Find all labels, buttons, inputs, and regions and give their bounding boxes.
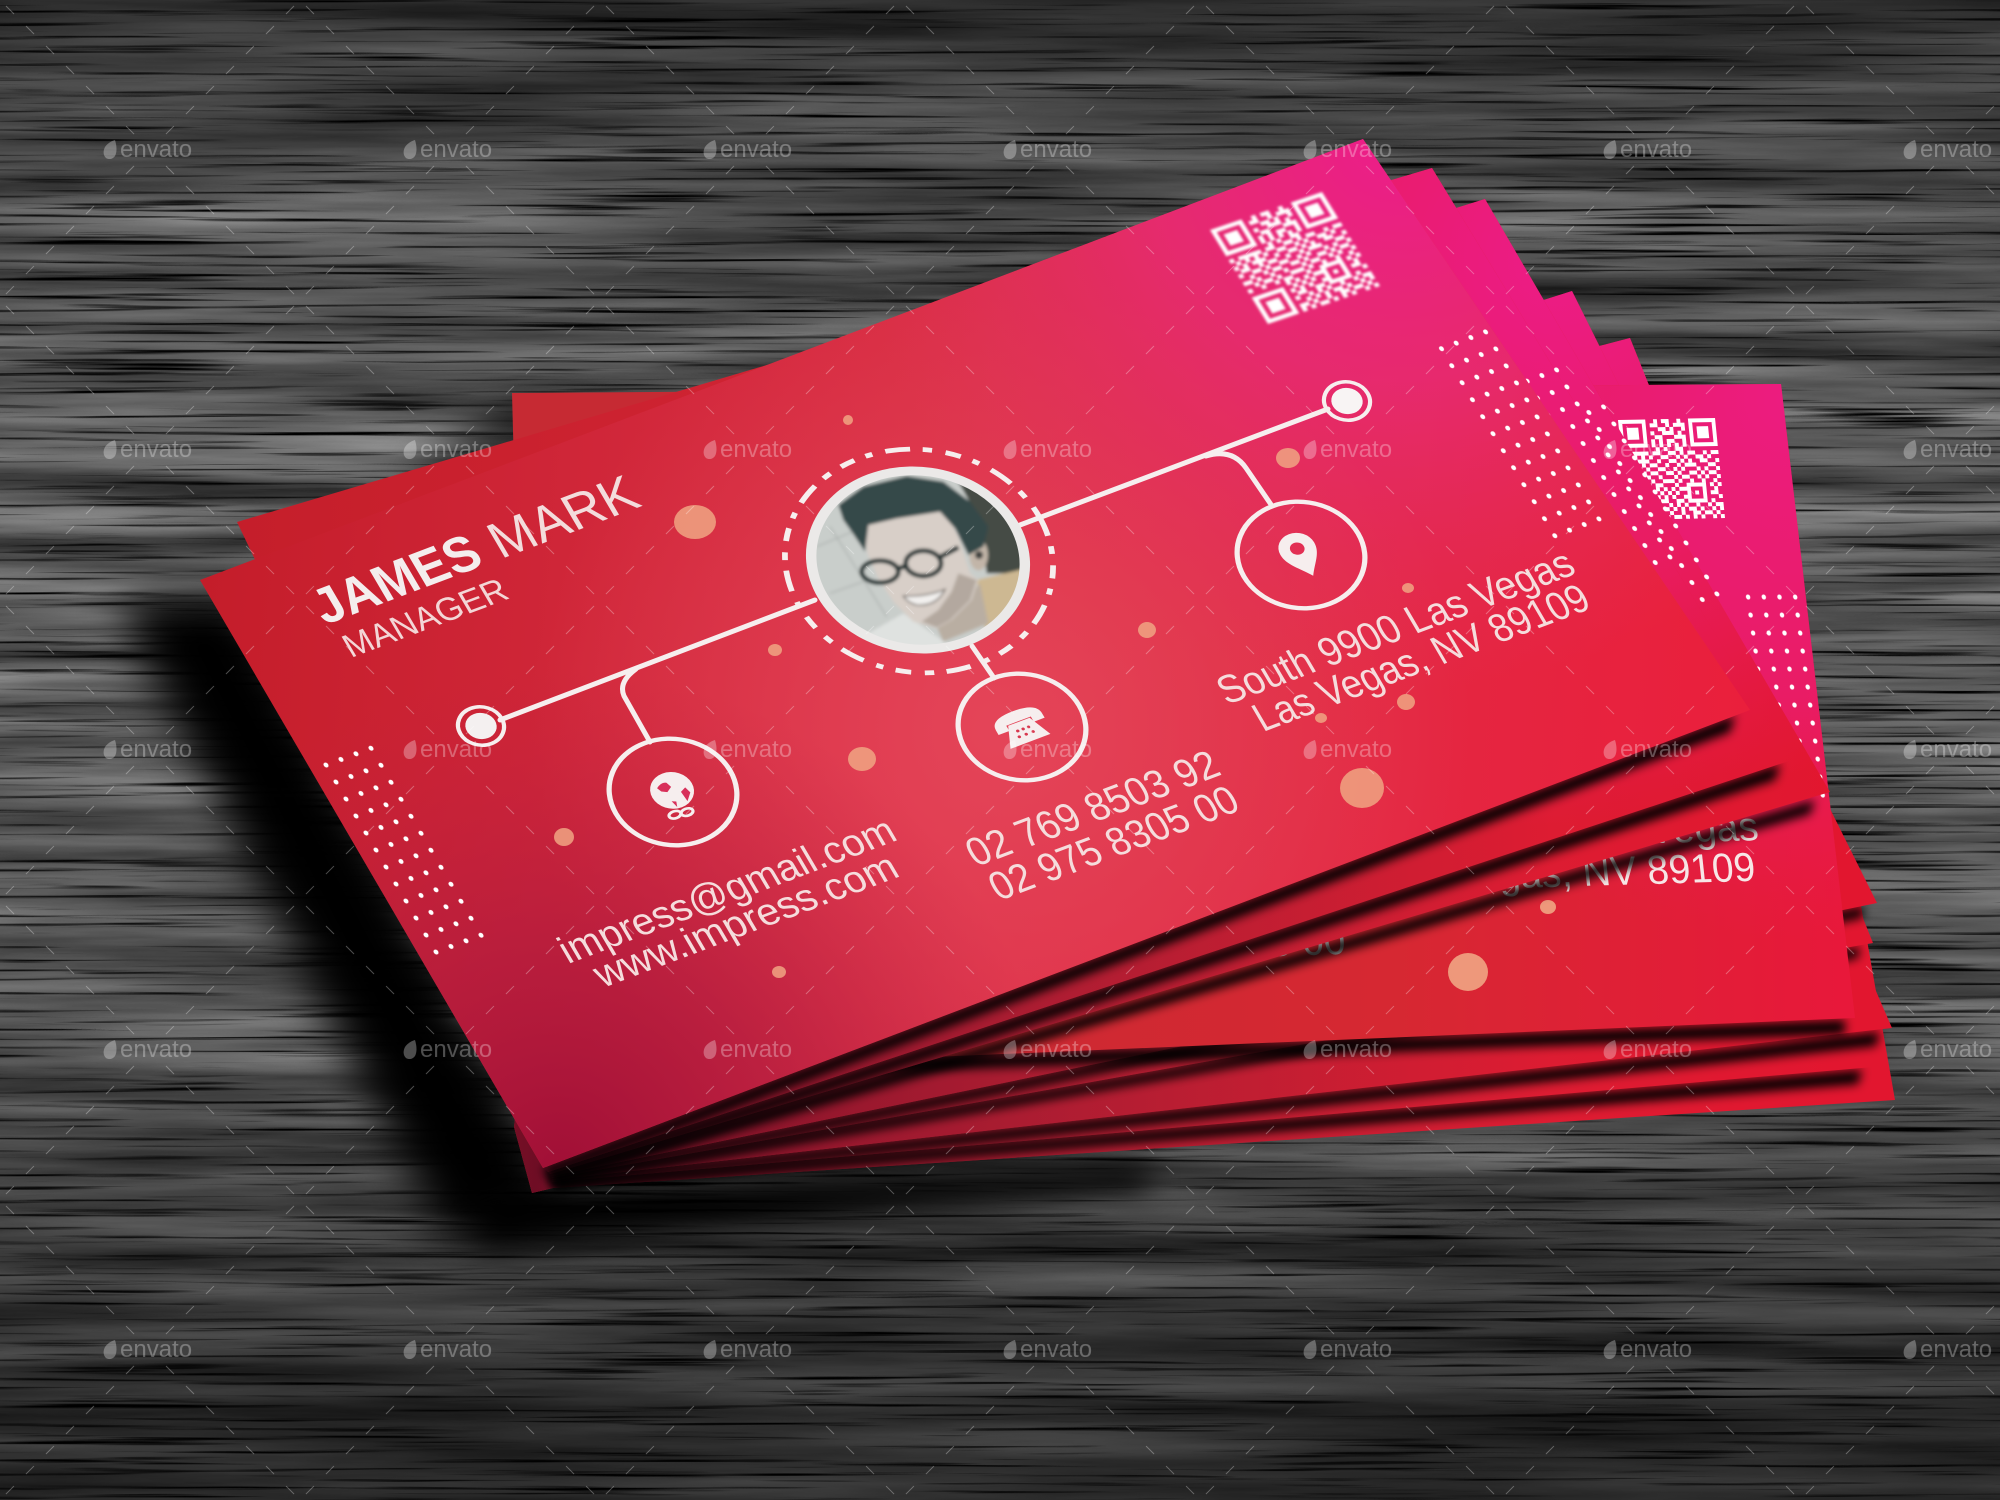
shirt: [870, 614, 945, 645]
smile: [903, 589, 945, 605]
envato watermark grid: envato: [720, 1336, 792, 1363]
envato watermark grid: envato: [120, 136, 192, 163]
back card phone text: 02 975 8305 00: [1070, 918, 1348, 971]
card: third card from top: [300, 199, 1830, 1174]
back card QR code: [1618, 420, 1725, 518]
beard: [922, 573, 977, 627]
envato watermark grid: envato: [1020, 1336, 1092, 1363]
envato watermark grid: envato: [1320, 436, 1392, 463]
envato watermark grid: envato: [1320, 1036, 1392, 1063]
envato watermark grid: envato: [1020, 436, 1092, 463]
envato watermark grid: envato: [1620, 1336, 1692, 1363]
envato watermark grid: envato: [420, 436, 492, 463]
QR code: [1211, 194, 1379, 322]
envato watermark grid: envato: [1920, 436, 1992, 463]
envato watermark grid: envato: [720, 136, 792, 163]
icon: telephone: [990, 703, 1054, 750]
envato watermark grid: envato: [1920, 1336, 1992, 1363]
text: address: South 9900 Las Vegas: [1208, 541, 1583, 713]
envato watermark grid: envato: [120, 1036, 192, 1063]
face: [863, 508, 978, 628]
envato watermark grid: envato: [720, 436, 792, 463]
glasses: [862, 547, 958, 583]
envato watermark grid: envato: [1320, 136, 1392, 163]
neck: [937, 583, 988, 642]
photo background: [816, 475, 1000, 643]
envato watermark grid: envato: [120, 736, 192, 763]
second card dot pattern: [1500, 359, 1682, 585]
panel: top business card: [200, 139, 1750, 1168]
cast shadow of the card stack on the table: [115, 392, 1150, 1250]
envato watermark grid: envato: [1020, 736, 1092, 763]
card: fanned card E: [400, 338, 1873, 1178]
text: email and website: www.impress.com: [584, 844, 906, 996]
back card dot pattern: [1739, 588, 1832, 804]
timeline node: left: [450, 701, 512, 751]
card: second from bottom: [540, 700, 1892, 1180]
heading: name: MARK: [477, 464, 649, 569]
envato watermark grid: envato: [1920, 136, 1992, 163]
envato watermark grid: envato: [720, 1036, 792, 1063]
envato watermark grid: envato: [420, 136, 492, 163]
back card address text: South 9900 Las Vegas: [1356, 804, 1761, 861]
envato watermark grid: envato: [1620, 136, 1692, 163]
jacket: [976, 567, 1020, 627]
envato watermark grid: envato: [1620, 436, 1692, 463]
card: bottom: [514, 900, 1895, 1193]
envato watermark grid: envato: [420, 1336, 492, 1363]
icon: globe circle: [587, 722, 759, 862]
dot pattern: left: [314, 737, 494, 963]
envato watermark grid: envato: [120, 1336, 192, 1363]
card stack: lower red cards: [350, 291, 1895, 1193]
panel: back card with QR code: [512, 384, 1855, 1074]
icon: location pin circle: [1215, 485, 1387, 625]
icon: location pin: [1272, 528, 1330, 582]
text: phone numbers: 02 769 8503 92: [957, 743, 1228, 875]
back card decorative circles: [1448, 900, 1556, 991]
white photo frame: [768, 437, 1068, 683]
timeline connector lines: [500, 409, 1328, 742]
icon: telephone circle: [936, 657, 1108, 797]
envato watermark grid: envato: [420, 1036, 492, 1063]
text: job title: MANAGER: [335, 571, 515, 665]
hair: [838, 476, 988, 555]
text: phone numbers: 02 975 8305 00: [980, 778, 1247, 909]
timeline node: right: [1316, 376, 1378, 426]
card: second card from top: [237, 168, 1792, 1172]
back card address text: [1356, 804, 1761, 901]
third card dot pattern: [1547, 396, 1729, 622]
back card address text: Las Vegas, NV 89109: [1377, 844, 1758, 901]
dot pattern: right: [1429, 321, 1611, 547]
decorative salmon circles: [554, 415, 1415, 978]
dashed ring around photo: [739, 414, 1099, 708]
envato watermark grid: envato: [1920, 1036, 1992, 1063]
envato watermark grid: envato: [720, 736, 792, 763]
heading: name: JAMES: [301, 523, 492, 635]
card face with gradient: [200, 139, 1750, 1168]
envato watermark grid: envato: [1020, 136, 1092, 163]
envato watermark grid: envato: [1020, 1036, 1092, 1063]
text: address: Las Vegas, NV 89109: [1244, 576, 1598, 740]
envato watermark grid: envato: [120, 436, 192, 463]
envato watermark grid: envato: [1320, 736, 1392, 763]
envato watermark grid: envato: [1620, 736, 1692, 763]
envato watermark grid: envato: [1920, 736, 1992, 763]
ear: [969, 540, 988, 570]
icon: globe with chain: [643, 766, 707, 823]
envato watermark grid: envato: [1620, 1036, 1692, 1063]
text: email and website: impress@gmail.com: [549, 808, 904, 971]
envato watermark grid: envato: [1320, 1336, 1392, 1363]
portrait photo: [816, 475, 1020, 644]
card: fanned card D: [350, 291, 1877, 1176]
envato watermark grid: envato: [420, 736, 492, 763]
heading: name: [301, 464, 649, 635]
card: third from bottom: [540, 900, 1873, 1182]
